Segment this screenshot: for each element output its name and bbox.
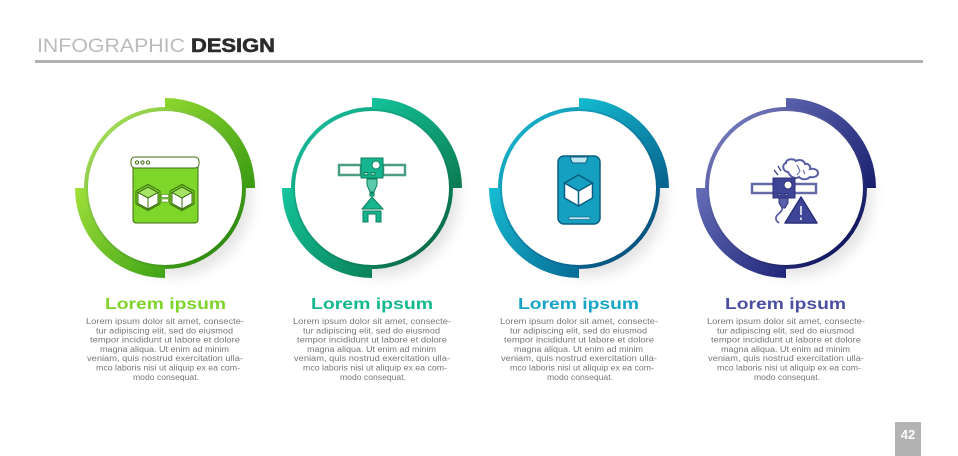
text block 3: veniam, quis nostrud exercitation ulla- — [501, 354, 657, 363]
text block 2: mco laboris nisi ut aliquip ex ea com- — [303, 364, 447, 372]
panel: step 1 — [75, 98, 255, 382]
text block 4: tur adipiscing elit, sed do eiusmod — [717, 326, 854, 335]
text block 3: tempor incididunt ut labore et dolore — [504, 336, 655, 345]
text block 4: modo consequat. — [754, 373, 820, 382]
icon: browser with two cubes — [131, 157, 199, 223]
text block 3: tur adipiscing elit, sed do eiusmod — [510, 326, 647, 335]
text block 4: mco laboris nisi ut aliquip ex ea com- — [717, 364, 861, 372]
text block 2: veniam, quis nostrud exercitation ulla- — [294, 354, 450, 363]
ring 1 — [75, 98, 255, 278]
heading 3: Lorem ipsum — [518, 296, 639, 313]
text block 1: mco laboris nisi ut aliquip ex ea com- — [96, 364, 240, 372]
text block 4 — [707, 317, 865, 382]
text block 1: tur adipiscing elit, sed do eiusmod — [96, 326, 233, 335]
ring 3 — [489, 98, 669, 278]
text block 2: tempor incididunt ut labore et dolore — [297, 336, 448, 345]
panel: step 4 — [696, 98, 876, 382]
icon: 3D printer printing a house — [339, 158, 405, 222]
text block 4: magna aliqua. Ut enim ad minim — [721, 345, 850, 354]
heading 4: Lorem ipsum — [725, 296, 846, 313]
text block 2: magna aliqua. Ut enim ad minim — [307, 345, 436, 354]
text block 3 — [500, 317, 658, 382]
page number: 42 — [901, 427, 915, 442]
text block 1: modo consequat. — [133, 373, 199, 382]
panel: step 3 — [489, 98, 669, 382]
panel: step 2 — [282, 98, 462, 382]
text block 3: modo consequat. — [547, 373, 613, 382]
title: INFOGRAPHIC — [37, 35, 185, 57]
heading 2: Lorem ipsum — [311, 296, 433, 313]
text block 4: veniam, quis nostrud exercitation ulla- — [708, 354, 864, 363]
text block 1: tempor incididunt ut labore et dolore — [90, 336, 241, 345]
text block 3: magna aliqua. Ut enim ad minim — [514, 345, 643, 354]
text block 2: Lorem ipsum dolor sit amet, consecte- — [293, 317, 451, 326]
title rule — [35, 60, 923, 63]
text block 1: veniam, quis nostrud exercitation ulla- — [87, 354, 243, 363]
text block 1 — [86, 317, 244, 382]
ring 4 — [696, 98, 876, 278]
icon: smartphone with cube — [558, 156, 600, 224]
text block 3: Lorem ipsum dolor sit amet, consecte- — [500, 317, 658, 326]
text block 4: Lorem ipsum dolor sit amet, consecte- — [707, 317, 865, 326]
page number — [895, 422, 921, 456]
heading 1: Lorem ipsum — [105, 296, 226, 313]
title — [37, 35, 275, 57]
title: DESIGN — [191, 35, 275, 57]
text block 2 — [293, 317, 451, 382]
text block 1: magna aliqua. Ut enim ad minim — [100, 345, 229, 354]
text block 2: modo consequat. — [340, 373, 406, 382]
text block 2: tur adipiscing elit, sed do eiusmod — [303, 326, 440, 335]
icon: smoking 3D printer with warning triangle — [752, 159, 818, 223]
text block 3: mco laboris nisi ut aliquip ex ea com- — [510, 364, 654, 372]
text block 4: tempor incididunt ut labore et dolore — [711, 336, 862, 345]
text block 1: Lorem ipsum dolor sit amet, consecte- — [86, 317, 244, 326]
ring 2 — [282, 98, 462, 278]
